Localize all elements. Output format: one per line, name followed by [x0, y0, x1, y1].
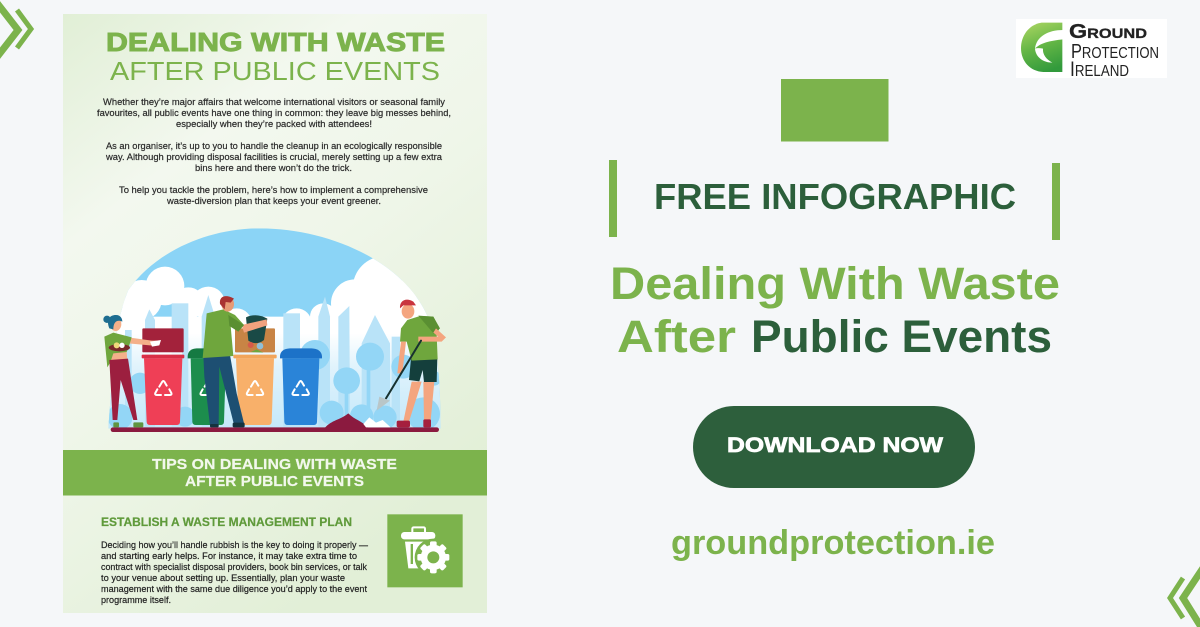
poster intro text: bins here and there won’t do the trick.: [195, 163, 352, 174]
right accent bar: [1052, 163, 1060, 240]
icon: bin with gear: [387, 514, 463, 587]
panel: infographic preview poster: [63, 14, 487, 613]
section body text: [101, 540, 368, 606]
man dropping rubbish bag in orange bin: [203, 296, 267, 427]
logo wordmark: IRELAND: [1070, 58, 1129, 81]
orange recycling bin: [233, 328, 277, 425]
logo wordmark: GROUND: [1069, 21, 1147, 43]
left accent bar: [609, 160, 617, 237]
red recycling bin: [142, 328, 184, 425]
tips banner: AFTER PUBLIC EVENTS: [185, 473, 364, 490]
poster title: DEALING WITH WASTE: [106, 29, 445, 57]
logo mark: [1021, 23, 1063, 72]
poster intro text: favourites, all public events have one thing in common: they leave big messes behind,: [97, 108, 451, 119]
poster intro text: Whether they’re major affairs that welcome international visitors or seasonal family: [103, 97, 445, 108]
poster intro text: [97, 97, 451, 207]
section body text: programme itself.: [101, 595, 171, 606]
poster intro text: way. Although providing disposal facilities is crucial, merely setting up a few extra: [105, 152, 443, 163]
soil pile and litter: [325, 413, 391, 428]
button: download now: DOWNLOAD NOW: [727, 434, 943, 457]
poster intro text: waste-diversion plan that keeps your event greener.: [166, 196, 381, 207]
section body text: Deciding how you’ll handle rubbish is the key to doing it properly —: [101, 540, 368, 551]
decorative chevrons bottom right: [1170, 568, 1200, 627]
blue recycling bin: [280, 348, 322, 425]
heading: free infographic: FREE INFOGRAPHIC: [654, 176, 1016, 217]
main title: After: [617, 311, 736, 362]
logo wordmark: [1069, 21, 1159, 81]
decorative chevrons top left: [0, 3, 31, 57]
section body text: and starting early helps. For instance, it may take extra time to: [101, 551, 357, 562]
logo: Ground Protection Ireland: [1016, 19, 1167, 81]
poster intro text: As an organiser, it’s up to you to handle the cleanup in an ecologically responsible: [106, 141, 442, 152]
tips banner: [63, 450, 487, 496]
main title: Public Events: [751, 311, 1052, 362]
main title: Dealing With Waste: [610, 258, 1060, 309]
poster title: [106, 29, 445, 86]
poster intro text: especially when they’re packed with attendees!: [176, 119, 372, 130]
section heading: waste management plan: ESTABLISH A WASTE MANAGEMENT PLAN: [101, 516, 352, 529]
section body text: management with the same due diligence you’d apply to the event: [101, 584, 367, 595]
section body text: contract with specialist disposal providers, book bin services, or talk: [101, 562, 367, 573]
section body text: to your venue about setting up. Essentially, plan your waste: [101, 573, 345, 584]
ground line: [111, 427, 439, 432]
button: download now: [693, 406, 975, 488]
man with red cap using shovel: [377, 300, 446, 427]
green placeholder block: [781, 79, 888, 142]
logo wordmark: PROTECTION: [1071, 41, 1159, 63]
main title: [610, 258, 1060, 362]
sky dome with clouds, skyline and trees: [107, 227, 447, 431]
poster title: AFTER PUBLIC EVENTS: [110, 58, 440, 86]
tips banner: TIPS ON DEALING WITH WASTE: [152, 456, 397, 473]
woman holding plate of rubbish: [103, 315, 161, 427]
poster intro text: To help you tackle the problem, here’s how to implement a comprehensive: [119, 185, 428, 196]
illustration: people sorting waste into recycling bins: [103, 227, 447, 432]
website url: groundprotection.ie: [671, 524, 995, 562]
green recycling bin: [188, 348, 227, 425]
